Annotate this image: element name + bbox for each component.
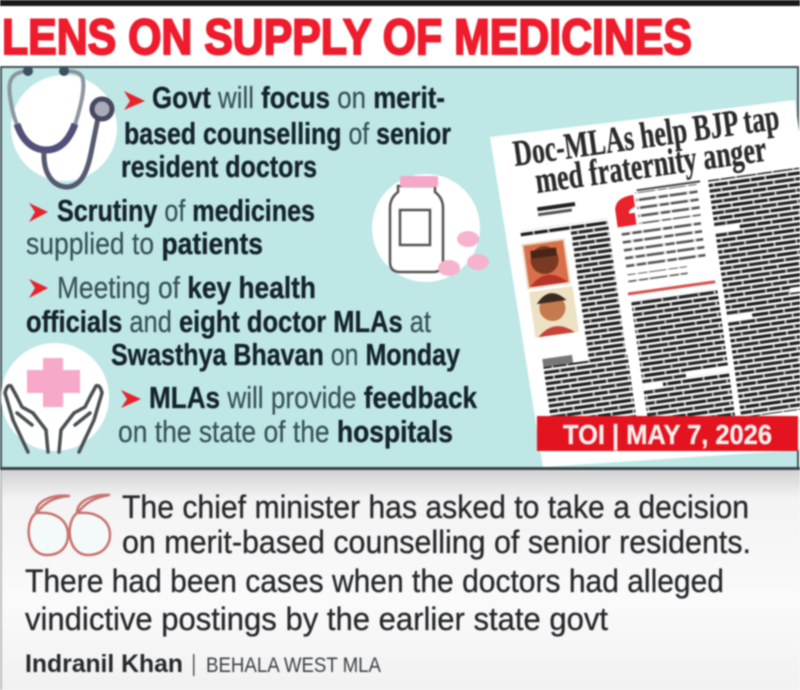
panel: quote xyxy=(0,467,800,690)
bullet: merit-based counselling: Govt will focus on merit- xyxy=(152,80,445,115)
bullet: scrutiny of medicines: Scrutiny of medicines xyxy=(57,193,315,228)
bullet: meeting of officials: Meeting of key health xyxy=(57,270,316,305)
bullet: MLA feedback xyxy=(118,380,478,449)
date banner: TOI | MAY 7, 2026 xyxy=(563,419,772,450)
quote text: vindictive postings by the earlier state govt xyxy=(25,601,608,637)
newspaper clipping xyxy=(490,97,800,467)
icon: quotation mark xyxy=(29,495,110,555)
top black bar xyxy=(0,0,800,6)
bullet: MLA feedback: MLAs will provide feedback xyxy=(149,380,478,415)
quote attribution xyxy=(25,650,381,678)
quote attribution: Indranil Khan xyxy=(25,650,183,678)
bullet: merit-based counselling xyxy=(121,80,451,184)
bullet: meeting of officials: Swasthya Bhavan on Monday xyxy=(111,337,461,372)
clipping body columns xyxy=(520,166,800,418)
bullet: MLA feedback: on the state of the hospitals xyxy=(118,414,453,449)
quote text xyxy=(25,489,751,637)
clipping photo: first MLA xyxy=(521,238,571,290)
bullet: meeting of officials: officials and eight doctor MLAs at xyxy=(26,304,431,339)
bullet: merit-based counselling: resident doctors xyxy=(121,149,317,184)
quote text: on merit-based counselling of senior residents. xyxy=(122,524,751,560)
quote text: There had been cases when the doctors had alleged xyxy=(25,563,724,599)
bullet: scrutiny of medicines: supplied to patients xyxy=(26,226,263,261)
panel: key points xyxy=(1,66,798,468)
bullet: meeting of officials xyxy=(26,270,461,372)
icon: medicine bottle and pills xyxy=(372,174,489,282)
clipping photo: second MLA xyxy=(529,286,579,338)
bullet: scrutiny of medicines xyxy=(26,193,315,261)
clipping quote mark xyxy=(613,195,637,227)
icon: caring hands with medical cross xyxy=(1,343,109,452)
bullet: merit-based counselling: based counselling of senior xyxy=(124,116,451,151)
icon: stethoscope xyxy=(9,66,117,187)
quote text: The chief minister has asked to take a decision xyxy=(122,489,749,525)
quote attribution: BEHALA WEST MLA xyxy=(206,654,381,677)
title: LENS ON SUPPLY OF MEDICINES xyxy=(2,9,692,65)
